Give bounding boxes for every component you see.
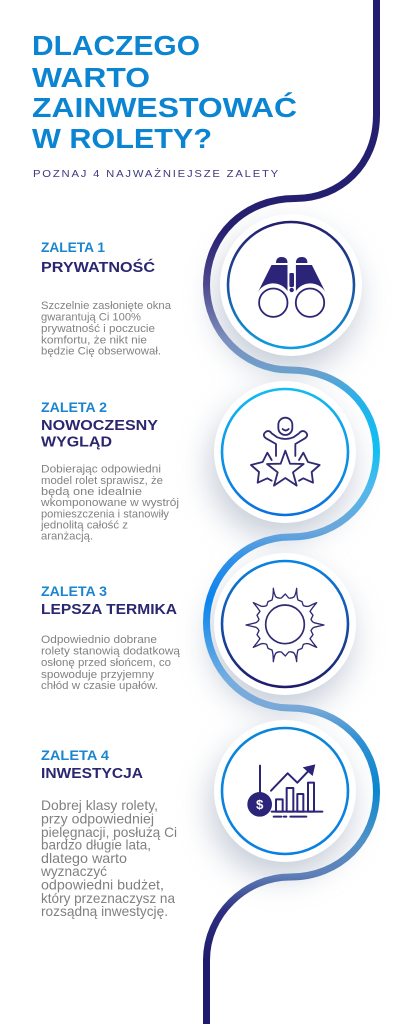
title: ZAINWESTOWAĆ xyxy=(32,92,297,123)
body text: model rolet sprawisz, że xyxy=(41,475,163,487)
panel: zaleta 2 text xyxy=(40,399,179,542)
body text: chłód w czasie upałów. xyxy=(41,680,158,692)
winding gradient ribbon xyxy=(206,0,376,1024)
body text: dlatego warto xyxy=(41,850,127,866)
body text: będą one idealnie xyxy=(41,486,142,498)
icon: binoculars xyxy=(258,257,325,317)
body text xyxy=(40,464,179,542)
body text: Dobrej klasy rolety, xyxy=(41,797,158,813)
ring xyxy=(222,561,348,687)
body text: osłonę przed słońcem, co xyxy=(41,657,171,669)
body text: prywatność i poczucie xyxy=(41,323,155,335)
icon: growth chart with dollar coin: $ xyxy=(256,797,264,812)
subtitle: POZNAJ 4 NAJWAŻNIEJSZE ZALETY xyxy=(33,167,280,180)
panel: zaleta 1 badge xyxy=(220,214,362,356)
icon: person with stars xyxy=(251,418,320,486)
icon: sun xyxy=(246,588,324,662)
heading: PRYWATNOŚĆ xyxy=(41,258,156,276)
white disc xyxy=(214,720,356,862)
title: DLACZEGO xyxy=(32,30,200,61)
body text: wyznaczyć xyxy=(40,863,107,879)
white disc xyxy=(220,214,362,356)
heading: LEPSZA TERMIKA xyxy=(41,602,178,618)
body text xyxy=(41,300,172,358)
title: WARTO xyxy=(32,62,150,93)
icon: growth chart with dollar coin xyxy=(247,764,322,817)
panel: zaleta 2 badge xyxy=(214,381,356,523)
ring xyxy=(228,222,354,348)
heading: INWESTYCJA xyxy=(41,766,144,782)
body text: rolety stanowią dodatkową xyxy=(41,646,181,658)
body text xyxy=(41,634,181,692)
body text: pomieszczenia i stanowiły xyxy=(41,508,169,520)
heading xyxy=(41,418,158,450)
body text: Dobierając odpowiedni xyxy=(41,464,161,476)
body text: odpowiedni budżet, xyxy=(41,876,164,892)
white disc xyxy=(214,553,356,695)
ring xyxy=(222,389,348,515)
body text: gwarantują Ci 100% xyxy=(41,312,141,324)
body text: będzie Cię obserwował. xyxy=(41,346,161,358)
body text: Szczelnie zasłonięte okna xyxy=(41,300,172,312)
body text: wkomponowane w wystrój xyxy=(40,497,179,509)
title: W ROLETY? xyxy=(32,123,212,154)
title xyxy=(32,30,297,154)
panel: zaleta 3 badge xyxy=(214,553,356,695)
white disc xyxy=(214,381,356,523)
body text: komfortu, że nikt nie xyxy=(41,334,147,346)
label: ZALETA 1 xyxy=(41,239,105,255)
panel: zaleta 3 text xyxy=(41,583,181,692)
card shadows xyxy=(210,229,358,877)
heading: NOWOCZESNY xyxy=(41,418,158,434)
label: ZALETA 3 xyxy=(41,583,107,599)
body text xyxy=(40,797,177,919)
body text: pielęgnacji, posłużą Ci xyxy=(41,824,177,840)
body text: rozsądną inwestycję. xyxy=(41,903,168,919)
panel: zaleta 4 badge xyxy=(214,720,356,862)
body text: aranżacją. xyxy=(41,530,93,542)
label: ZALETA 2 xyxy=(41,399,107,415)
heading: WYGLĄD xyxy=(41,434,112,450)
body text: spowoduje przyjemny xyxy=(41,669,155,681)
body text: przy odpowiedniej xyxy=(41,810,154,826)
ring xyxy=(222,728,348,854)
body text: bardzo długie lata, xyxy=(41,836,151,852)
panel: zaleta 4 text xyxy=(40,747,177,919)
panel: zaleta 1 text xyxy=(41,239,172,358)
body text: jednolitą całość z xyxy=(40,520,128,532)
body text: Odpowiednio dobrane xyxy=(41,634,157,646)
label: ZALETA 4 xyxy=(41,747,109,763)
body text: który przeznaczysz na xyxy=(41,890,175,906)
